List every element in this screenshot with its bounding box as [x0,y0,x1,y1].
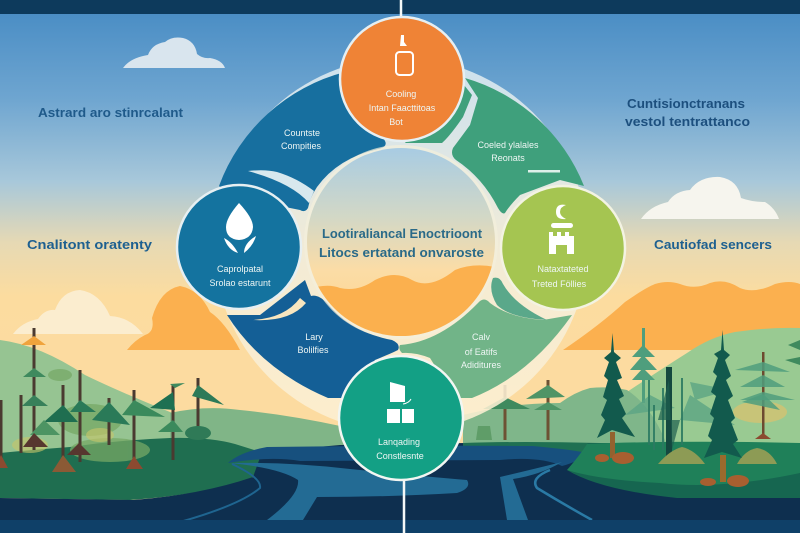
segment: top left [219,72,386,211]
icon: table [549,205,574,254]
side label: top right: Cuntisionctranans [627,97,745,111]
circle: blue left: Caprolpatal [217,264,263,274]
center circle [300,145,500,340]
fir tree: left [595,333,635,464]
circle: green right [501,186,625,310]
side label: middle left: Cnalitont oratenty [27,238,152,252]
segment: bottom left: Lary [305,332,323,342]
icon: blocks [387,382,414,423]
circle: green right: Treted Föllies [532,279,587,289]
island right [567,442,800,498]
segment: top right strip [405,80,472,143]
river and dark ground [0,442,800,522]
circle: orange top: Bot [389,117,403,127]
vertical connector line [401,0,404,533]
cloud: cream left [13,290,143,334]
side label: top right [625,97,750,129]
cycle diagram [177,17,625,480]
forest: middle right [476,380,565,440]
circle: green right: Nataxtateted [537,264,589,274]
hills: left [0,340,345,500]
forest: right [625,328,800,464]
top bar [0,0,800,14]
segment: bottom right: of Eatifs [465,347,498,357]
side label: top right: vestol tentrattanco [625,115,750,129]
segment: bottom right [399,278,572,398]
segment: bottom left [227,280,399,398]
circle: teal bottom [339,356,463,480]
cloud: orange left [127,286,240,350]
cloud: top right [641,177,779,219]
orange mountain band right [563,281,800,350]
segment: top left: Compities [281,141,322,151]
hills: right [463,328,800,460]
segment: top left: Countste [284,128,320,138]
circle: teal bottom: Lanqading [378,437,420,447]
segment: top right: Reonats [491,153,525,163]
circle: blue left: Srolao estarunt [209,278,271,288]
bottom bar [0,520,800,533]
cloud: top left [123,38,225,68]
circle: orange top [340,17,464,141]
ring base [214,58,588,432]
circle: orange top: Intan Faacttitoas [369,103,436,113]
forest: left [0,328,224,472]
center circle: Lootiraliancal Enoctrioont [322,227,483,241]
segment: top right [452,78,584,213]
fir tree: right [700,330,749,487]
side label: top left: Astrard aro stinrcalant [38,106,184,120]
segment: bottom left: Bolilfies [297,345,329,355]
icon: water drop with leaves [224,203,256,253]
segment: top right: Coeled ylalales [477,140,539,150]
side label: middle right: Cautiofad sencers [654,238,772,252]
segment: bottom right: Calv [472,332,490,342]
icon: bottle [396,35,413,75]
center circle: Litocs ertatand onvaroste [319,246,484,260]
circle: orange top: Cooling [386,89,416,99]
segment: bottom right: Adiditures [461,360,502,370]
circle: blue left [177,185,301,309]
circle: teal bottom: Constlesnte [376,451,424,461]
